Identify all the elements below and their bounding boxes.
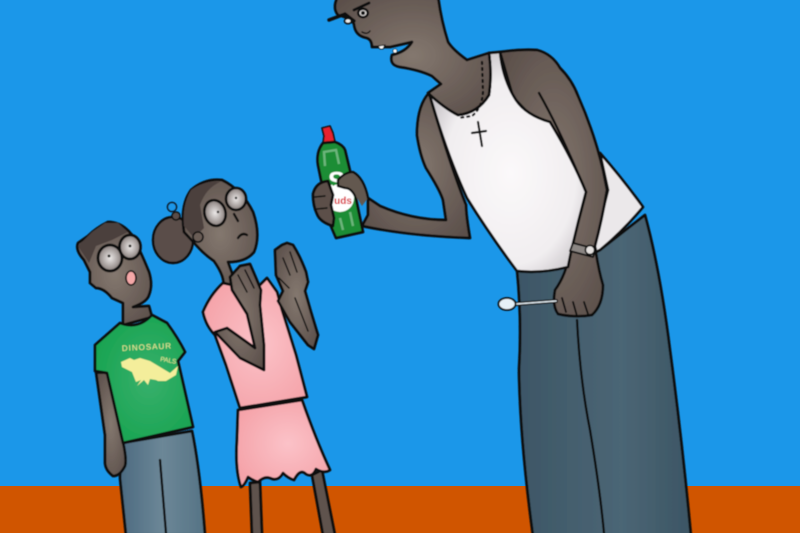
girl's arm at chin — [215, 264, 264, 370]
bottle body — [318, 142, 363, 238]
girl's frown — [234, 214, 247, 238]
girl's hair — [184, 182, 220, 238]
face details — [329, 3, 397, 53]
figure: man — [313, 0, 691, 533]
hand gripping bottle — [313, 172, 368, 226]
bottle label — [326, 184, 354, 212]
watch — [570, 243, 596, 257]
figure: boy: PALS — [160, 356, 177, 366]
boy's jeans — [120, 431, 205, 533]
man's right arm — [362, 93, 470, 238]
boy's neck and head — [77, 222, 152, 325]
boy's shirt — [95, 315, 193, 443]
boy's hair — [78, 223, 128, 263]
fingers on spoon hand — [562, 298, 588, 316]
dress top — [203, 278, 307, 408]
inner arm line — [539, 93, 586, 192]
girl's raised hand and arm — [275, 243, 318, 349]
man's left arm — [500, 50, 607, 316]
figure: girl — [153, 180, 335, 533]
bottle — [318, 126, 363, 238]
vest — [429, 52, 586, 272]
girl's head — [183, 180, 257, 288]
boy's mouth — [126, 271, 136, 285]
bottle: uds — [334, 196, 352, 207]
head and neck — [335, 0, 490, 115]
vest back panel — [592, 153, 643, 254]
dinosaur print — [121, 358, 178, 386]
eyes — [345, 18, 351, 24]
shirt slogan: DINOSAUR — [122, 341, 172, 353]
spoon — [498, 298, 556, 310]
floor — [0, 486, 800, 533]
figures — [77, 0, 691, 533]
necklace with cross — [458, 62, 486, 146]
girl's legs — [250, 482, 262, 533]
trouser leg crease — [577, 320, 604, 533]
boy's arm — [96, 372, 126, 476]
teeth — [378, 45, 385, 49]
glasses — [329, 14, 354, 21]
bottle cap — [322, 126, 335, 143]
boy's glasses — [98, 235, 140, 271]
girl's glasses — [201, 188, 246, 228]
hair bun — [153, 202, 193, 263]
fingers at chin — [238, 270, 254, 292]
figure: boy — [77, 222, 205, 533]
brand name: S — [328, 166, 345, 196]
girl's ear — [193, 232, 203, 242]
trousers — [517, 215, 691, 533]
dress skirt — [236, 400, 330, 487]
fingers of raised hand — [279, 252, 308, 331]
